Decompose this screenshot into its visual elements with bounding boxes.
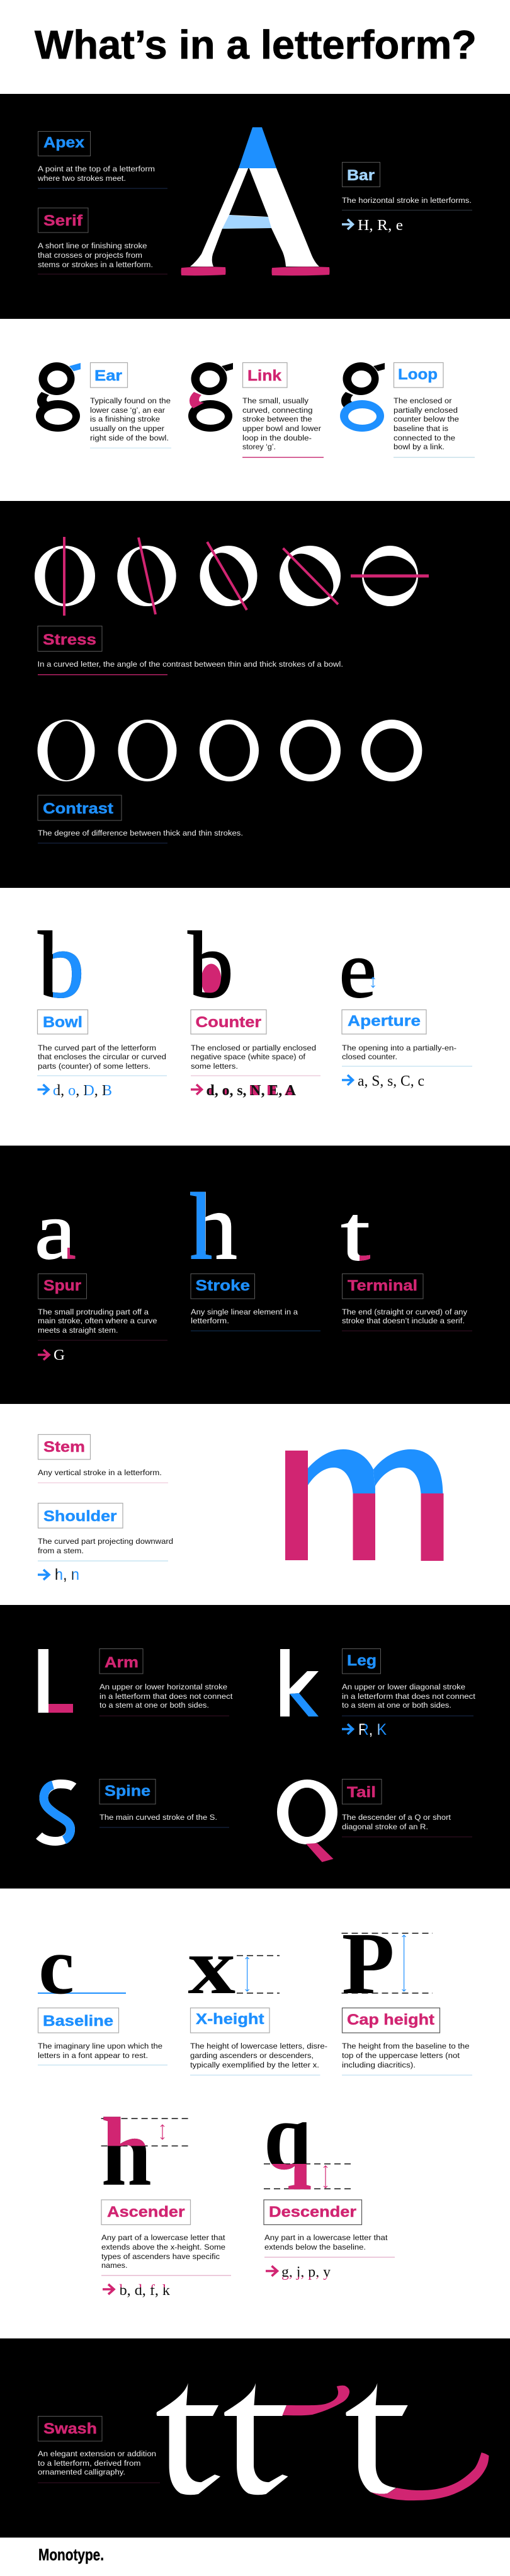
icon: arrow [38, 1350, 49, 1360]
label: Swash [38, 2416, 102, 2441]
text: Contrast description: The degree of difference between thick and thin strokes. [38, 829, 243, 837]
label: Cap height: Cap height [347, 2011, 434, 2028]
text: Cap height description: The height from the baseline to the [342, 2042, 470, 2050]
text: Cap height description [342, 2042, 470, 2069]
panel: ascender, descender [101, 2117, 395, 2297]
logo: Monotype: Monotype. [38, 2545, 104, 2564]
examples: H, R, e: H, R, e [358, 217, 403, 234]
label: X-height: X-height [196, 2011, 264, 2028]
label: Bowl [38, 1009, 88, 1034]
text: Link description: loop in the double- [242, 434, 312, 442]
label: Counter [191, 1009, 266, 1034]
examples: g, j, p, y: g, j, p, y [281, 2264, 331, 2280]
text: Aperture description [342, 1044, 456, 1061]
text: Bowl description: The curved part of the letterform [38, 1044, 156, 1052]
label: Stress [38, 626, 102, 652]
text: Shoulder description [38, 1537, 173, 1555]
label: Cap height [343, 2008, 439, 2033]
panel: arm, leg, spine, tail [38, 1648, 476, 1862]
label: Bar [343, 163, 380, 187]
label: Baseline [38, 2008, 118, 2033]
text: Counter description: negative space (white space) of [191, 1052, 306, 1061]
panel: ear, link, loop [36, 362, 475, 457]
text: Ascender description: extends above the x-height. Some [101, 2243, 225, 2251]
text: Loop description: counter below the [394, 415, 459, 423]
text: Swash description: An elegant extension or addition [38, 2449, 156, 2458]
panel: stress [35, 537, 429, 675]
text: Descender description: extends below the baseline. [264, 2243, 366, 2251]
letter h with ascender guides: h [101, 2098, 152, 2206]
letter S with spine highlighted [39, 1784, 74, 1841]
letter m with stems and shoulders [285, 1449, 443, 1561]
icon: arrow [38, 1084, 48, 1095]
label: Aperture [342, 1009, 426, 1034]
panel: baseline, x-height, cap height [38, 1914, 472, 2076]
letter q with descender guides: q [264, 2083, 312, 2190]
text: Descender description: Any part in a lowercase letter that [264, 2233, 388, 2242]
text: Counter description: The enclosed or partially enclosed [191, 1044, 316, 1052]
label: Stress: Stress [43, 631, 96, 648]
label: Serif [38, 208, 88, 233]
text: Spur description: meets a straight stem. [38, 1326, 118, 1335]
text: Terminal description: The end (straight or curved) of any [342, 1308, 468, 1316]
letter a with spur highlighted [37, 1219, 76, 1260]
label: Arm: Arm [105, 1654, 139, 1671]
label: Shoulder [38, 1504, 123, 1528]
text: Ear description: lower case ‘g’, an ear [90, 406, 165, 415]
panel: swash [38, 2383, 489, 2500]
text: Stress description: In a curved letter, the angle of the contrast between thin and thick strokes of a bowl. [38, 660, 343, 669]
text: Leg description: to a stem at one or both sides. [342, 1701, 451, 1710]
icon: arrow [342, 219, 353, 229]
letter A diagram [181, 127, 330, 275]
letter g with loop highlighted [340, 362, 385, 432]
icon: arrow [103, 2284, 114, 2294]
text: Spur description [38, 1308, 157, 1335]
diagram: five O with increasing stroke weight [38, 720, 422, 781]
letter g with ear highlighted [36, 362, 81, 432]
label: Serif: Serif [43, 212, 83, 229]
text: X-height description: The height of lowercase letters, disre- [190, 2042, 327, 2050]
letter L with arm highlighted [38, 1649, 73, 1713]
icon: arrow [266, 2266, 277, 2276]
label: Link: Link [247, 367, 281, 384]
text: Link description: The small, usually [242, 396, 309, 405]
label: Ascender [101, 2200, 190, 2224]
text: Tail description: The descender of a Q or short [342, 1813, 451, 1822]
text: X-height description [190, 2042, 327, 2069]
letter b with bowl highlighted [38, 930, 82, 998]
label: Stroke [191, 1274, 254, 1299]
label: Aperture: Aperture [348, 1013, 421, 1030]
text: Serif description: stems or strokes in a letterform. [38, 260, 153, 269]
title: What’s in a letterform? [35, 22, 477, 67]
text: Counter description: some letters. [191, 1062, 238, 1071]
text: Baseline description: letters in a font appear to rest. [38, 2051, 148, 2060]
label: Apex [38, 131, 91, 156]
label: Leg: Leg [347, 1652, 377, 1669]
text: Stroke description [191, 1308, 298, 1325]
text: Counter description [191, 1044, 316, 1071]
examples: d, o, D, B: d, o, D, B [53, 1083, 112, 1099]
label: Baseline: Baseline [43, 2013, 113, 2030]
text: Swash description [38, 2449, 156, 2476]
text: Link description: storey ‘g’. [242, 442, 276, 451]
letter g with link highlighted [188, 362, 233, 432]
text: Tail description: diagonal stroke of an R. [342, 1822, 428, 1831]
label: Spine [99, 1780, 156, 1804]
text: Ear description [90, 396, 171, 442]
text: Spur description: main stroke, often where a curve [38, 1316, 157, 1325]
label: Bowl: Bowl [43, 1014, 82, 1031]
text: Terminal description [342, 1308, 468, 1325]
text: Ear description: is a finishing stroke [90, 415, 160, 423]
icon: arrow [342, 1075, 353, 1085]
text: Bowl description: that encloses the circular or curved [38, 1052, 166, 1061]
text: Apex description: A point at the top of a letterform [38, 164, 155, 173]
text: Loop description: partially enclosed [394, 406, 458, 415]
letter c on baseline: c [38, 1921, 74, 2011]
examples: h, n: h, n [55, 1566, 79, 1584]
text: Spur description: The small protruding part off a [38, 1308, 149, 1316]
label: Stroke: Stroke [195, 1277, 250, 1294]
letter h with ascender guides [101, 2117, 188, 2185]
label: Ear: Ear [94, 367, 123, 384]
label: Contrast [38, 795, 122, 820]
letter h with stroke highlighted: h [190, 1175, 237, 1279]
label: Tail [343, 1780, 382, 1804]
text: Arm description [99, 1682, 233, 1710]
letter P with cap-height guides: P [342, 1914, 394, 2013]
label: Loop: Loop [398, 366, 438, 383]
text: Stroke description: Any single linear element in a [191, 1308, 298, 1316]
examples: a, S, s, C, c: a, S, s, C, c [358, 1073, 424, 1090]
label: Stem: Stem [43, 1439, 85, 1456]
letters t t t with swashes [157, 2383, 489, 2500]
icon: arrow [38, 1570, 49, 1580]
text: Leg description: An upper or lower diagonal stroke [342, 1682, 465, 1691]
text: Arm description: to a stem at one or both sides. [99, 1701, 209, 1710]
label: Terminal [343, 1274, 423, 1299]
examples: b, d, f, k: b, d, f, k [120, 2282, 170, 2299]
label: X-height [190, 2008, 269, 2033]
text: Shoulder description: The curved part projecting downward [38, 1537, 173, 1546]
text: Swash description: ornamented calligraphy. [38, 2468, 125, 2476]
letter x with x-height guides: x [188, 1923, 235, 2011]
examples: d, o, s, N, E, A: d, o, s, N, E, A [207, 1083, 297, 1099]
text: X-height description: typically exemplified by the letter x. [190, 2061, 319, 2069]
text: Ascender description: Any part of a lowercase letter that [101, 2233, 225, 2242]
text: Ascender description: names. [101, 2261, 127, 2270]
examples: R, K: R, K [358, 1721, 387, 1739]
text: Bar description: The horizontal stroke in letterforms. [342, 196, 472, 205]
text: Bowl description [38, 1044, 166, 1071]
letter e with aperture arrow: e [339, 926, 377, 1015]
letter b with bowl highlighted: b [38, 912, 84, 1017]
text: Serif description: that crosses or projects from [38, 251, 142, 260]
letter h with ascender guides: h [101, 2098, 152, 2206]
diagram: five O with stress axes [35, 537, 429, 616]
icon: arrow [342, 1724, 353, 1734]
text: Swash description: to a letterform, derived from [38, 2459, 140, 2468]
label: Stem [38, 1434, 91, 1459]
label: Spur: Spur [43, 1277, 81, 1294]
label: Spine: Spine [105, 1783, 150, 1800]
letter x with x-height guides [188, 1923, 280, 2011]
letter h with stroke highlighted [190, 1192, 237, 1259]
letter q with descender guides [264, 2122, 351, 2189]
example: G: G [54, 1347, 65, 1364]
text: Ascender description: types of ascenders have specific [101, 2252, 220, 2261]
label: Loop [394, 363, 443, 388]
label: Terminal: Terminal [348, 1277, 417, 1294]
letter t with terminal highlighted: t [341, 1190, 370, 1277]
label: Bar: Bar [347, 167, 375, 184]
text: Ear description: right side of the bowl. [90, 434, 169, 442]
letter k with leg highlighted [280, 1649, 319, 1716]
text: Bowl description: parts (counter) of some letters. [38, 1062, 150, 1071]
label: Arm [99, 1648, 143, 1674]
letter b with counter highlighted: b [188, 912, 234, 1017]
text: Apex description [37, 164, 155, 183]
text: Loop description: The enclosed or [394, 396, 452, 405]
label: Link [243, 363, 287, 388]
text: Aperture description: The opening into a partially-en- [342, 1044, 456, 1052]
text: Shoulder description: from a stem. [38, 1546, 84, 1555]
text: Loop description: connected to the [394, 434, 455, 442]
letter a with spur highlighted: a [35, 1185, 76, 1276]
panel: stem, shoulder [38, 1434, 443, 1584]
panel: contrast [38, 720, 422, 843]
label: Apex: Apex [43, 134, 84, 151]
label: Leg [343, 1648, 380, 1674]
panel: apex, serif, bar [37, 127, 472, 275]
letter P with cap-height guides [341, 1914, 433, 2013]
text: Tail description [342, 1813, 451, 1831]
text: Serif description: A short line or finishing stroke [38, 241, 147, 250]
text: Ear description: Typically found on the [90, 396, 171, 405]
text: Aperture description: closed counter. [342, 1052, 397, 1061]
letter b with bowl highlighted: b [38, 912, 84, 1017]
text: Stem description: Any vertical stroke in a letterform. [38, 1468, 162, 1477]
text: Spine description: The main curved stroke of the S. [99, 1813, 217, 1822]
label: Spur [38, 1274, 87, 1299]
label: Ear [91, 363, 127, 388]
label: Tail: Tail [347, 1784, 376, 1801]
text: Descender description [264, 2233, 388, 2251]
text: Loop description: baseline that is [394, 424, 448, 433]
label: Ascender: Ascender [107, 2204, 185, 2221]
text: Link description [242, 396, 321, 451]
text: Leg description: in a letterform that does not connect [342, 1692, 476, 1701]
label: Descender [264, 2200, 361, 2224]
label: Counter: Counter [195, 1014, 262, 1031]
text: Terminal description: stroke that doesn’t include a serif. [342, 1316, 465, 1325]
letter q with descender guides: q [264, 2083, 312, 2190]
letter t with terminal highlighted [341, 1215, 370, 1261]
letter a with spur highlighted: a [35, 1185, 76, 1276]
text: Cap height description: including diacritics). [342, 2061, 416, 2069]
label: Shoulder: Shoulder [43, 1508, 117, 1525]
icon: arrow [191, 1084, 201, 1095]
panel: bowl, counter, aperture [37, 930, 472, 1098]
text: Cap height description: top of the uppercase letters (not [342, 2051, 460, 2060]
text: Ear description: usually on the upper [90, 424, 164, 433]
label: Contrast: Contrast [43, 800, 113, 817]
letter t with terminal highlighted: t [341, 1190, 370, 1277]
letter Q with tail highlighted [277, 1780, 337, 1862]
text: X-height description: garding ascenders or descenders, [190, 2051, 314, 2060]
text: Loop description [394, 396, 459, 451]
panel: spur, stroke, terminal [37, 1192, 472, 1361]
text: Serif description [38, 241, 153, 269]
text: Link description: upper bowl and lower [242, 424, 321, 433]
text: Link description: stroke between the [242, 415, 312, 423]
letter h with stroke highlighted: h [190, 1175, 237, 1279]
label: Descender: Descender [269, 2204, 357, 2221]
text: Baseline description: The imaginary line upon which the [38, 2042, 162, 2050]
text: Leg description [342, 1682, 476, 1710]
text: Arm description: An upper or lower horizontal stroke [99, 1682, 227, 1691]
text: Stroke description: letterform. [191, 1316, 229, 1325]
text: Link description: curved, connecting [242, 406, 313, 415]
text: Baseline description [38, 2042, 162, 2060]
text: Arm description: in a letterform that does not connect [99, 1692, 233, 1701]
text: Apex description: where two strokes meet. [37, 174, 126, 183]
label: Swash: Swash [43, 2420, 97, 2437]
text: Loop description: bowl by a link. [394, 442, 445, 451]
text: Ascender description [101, 2233, 225, 2270]
